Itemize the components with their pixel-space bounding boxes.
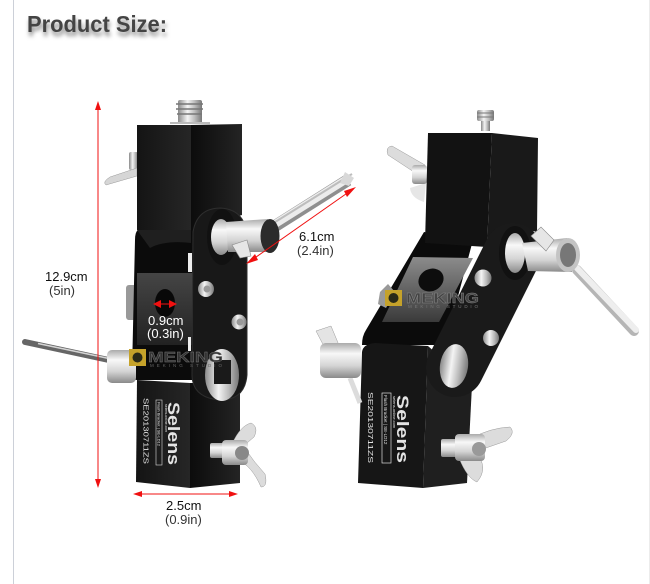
bottom block [358,343,472,488]
label: Selens branding: Flash Bracket | SE-LD12 [383,395,388,445]
left bracket: front view [25,100,354,488]
knurled wheel [378,284,395,308]
threaded stud [170,100,210,124]
dimension: lever length: 6.1cm [299,229,334,244]
lit panel [382,257,473,322]
side plate [192,208,247,400]
label: Selens branding [142,398,182,465]
threaded stud [477,110,494,131]
page edge line left [13,0,14,584]
watermark left: MEKING [148,349,223,366]
bottom block [136,380,240,488]
lever knob [499,226,580,280]
dimension: height [45,269,88,298]
dimension: block width: (0.9in) [165,512,202,527]
dimension: lever length: (2.4in) [297,243,334,258]
front wing nut [210,423,266,487]
lever knob [207,209,280,265]
arrow: hole width [153,300,177,308]
label: Selens branding [366,392,412,463]
watermark right: MEKING STUDIO [408,304,478,309]
centre channel [132,230,193,380]
dimension: lever length [297,229,334,258]
arrow: height [95,101,101,488]
title: Product Size: [27,11,167,37]
arrow: lever length [246,187,356,264]
mounting screws [198,281,246,330]
label: Selens branding: SE20130711ZS [366,392,375,463]
dimension: hole width: 0.9cm [148,313,183,328]
watermark left [129,349,223,368]
label: Selens branding: SE20130711ZS [142,398,148,464]
label: Selens branding: Selens [164,402,182,465]
label: Selens branding: Flash Bracket | SE-LD12 [156,402,162,447]
left lever knob [316,326,361,403]
dimension: height: 12.9cm [45,269,88,284]
label: Selens branding: selens-online.com [164,404,168,432]
watermark right [385,290,479,309]
dimension: height: (5in) [49,283,75,298]
dimension: block width: 2.5cm [166,498,201,513]
rear wing nut [105,152,138,185]
label: Selens branding: selens-online.com [392,396,397,429]
arrow: block width [133,491,238,497]
front wing nut [441,427,512,482]
dimension: hole width [147,313,184,341]
horizontal lever rod [272,172,354,228]
knurled wheel [126,285,137,320]
watermark right: MEKING [406,290,479,307]
lit panel with hole [137,253,193,351]
plate hole [205,349,239,401]
title: Product Size: [28,15,168,41]
mounting screws [474,270,499,346]
label: Selens branding: Selens [393,395,412,463]
dimension: block width [165,498,202,527]
right lever rod [577,268,636,331]
rear channel [362,232,473,345]
dimension: hole width: (0.3in) [147,326,184,341]
right bracket: tilted view [316,110,636,488]
side plate [455,252,513,368]
top block [137,124,242,248]
top block [425,133,538,247]
watermark left: MEKING STUDIO [150,363,222,368]
left lever rod [25,342,136,383]
rear wing nut [387,146,427,202]
plate hole [437,342,471,390]
